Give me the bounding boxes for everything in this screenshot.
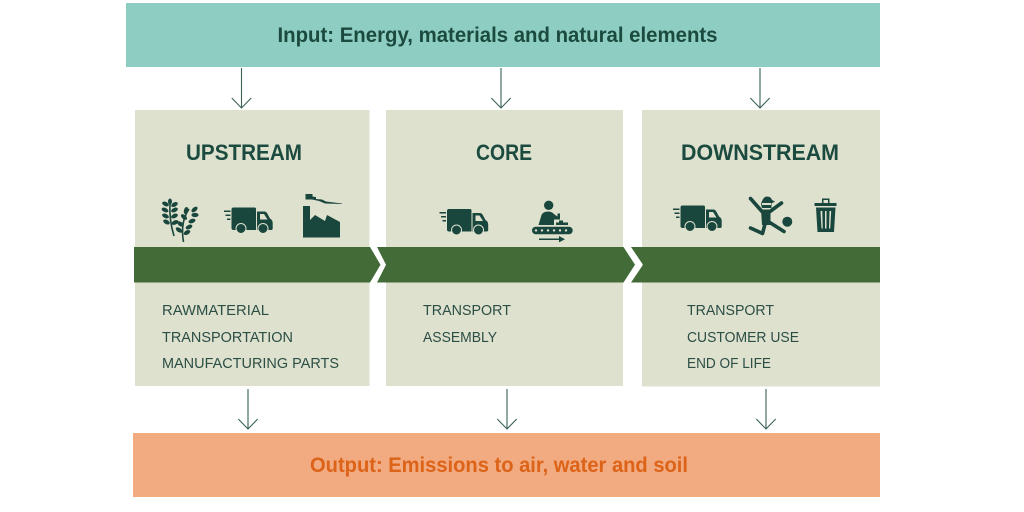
icon: assembly worker on conveyor [532,201,573,242]
label: transport: TRANSPORT [423,303,511,319]
arrow: downstream to output [756,389,776,429]
process band: downstream segment [631,247,880,282]
arrow: core to output [497,389,517,429]
heading: upstream: UPSTREAM [186,140,302,165]
arrow: input to upstream [232,68,251,108]
arrow: input to downstream [750,68,770,108]
heading: downstream: DOWNSTREAM [681,140,839,165]
output banner [133,433,880,497]
panel: downstream [642,110,880,386]
panel: upstream [135,110,370,386]
label: transport: TRANSPORT [687,303,774,319]
icon: factory [303,194,342,238]
label: raw material: RAWMATERIAL [162,303,269,319]
icon: trash bin [814,198,836,232]
label: transportation: TRANSPORTATION [162,330,293,346]
icon: truck [440,209,488,235]
label: end of life: END OF LIFE [687,356,771,372]
icon: person kicking ball [750,196,792,234]
arrow: upstream to output [238,389,258,429]
process band: upstream segment [134,247,380,282]
process band: core segment [377,247,635,282]
icon: truck [224,208,273,234]
arrow: input to core [491,68,511,108]
panel: core [386,110,623,386]
output banner: Output: Emissions to air, water and soil [310,454,688,477]
heading: core: CORE [476,140,532,165]
label: assembly: ASSEMBLY [423,330,497,346]
label: manufacturing parts: MANUFACTURING PARTS [162,356,339,372]
icon: wheat [161,198,199,242]
input banner: Input: Energy, materials and natural elements [278,24,718,47]
input banner [126,3,880,67]
label: customer use: CUSTOMER USE [687,330,799,346]
icon: truck [673,206,722,232]
